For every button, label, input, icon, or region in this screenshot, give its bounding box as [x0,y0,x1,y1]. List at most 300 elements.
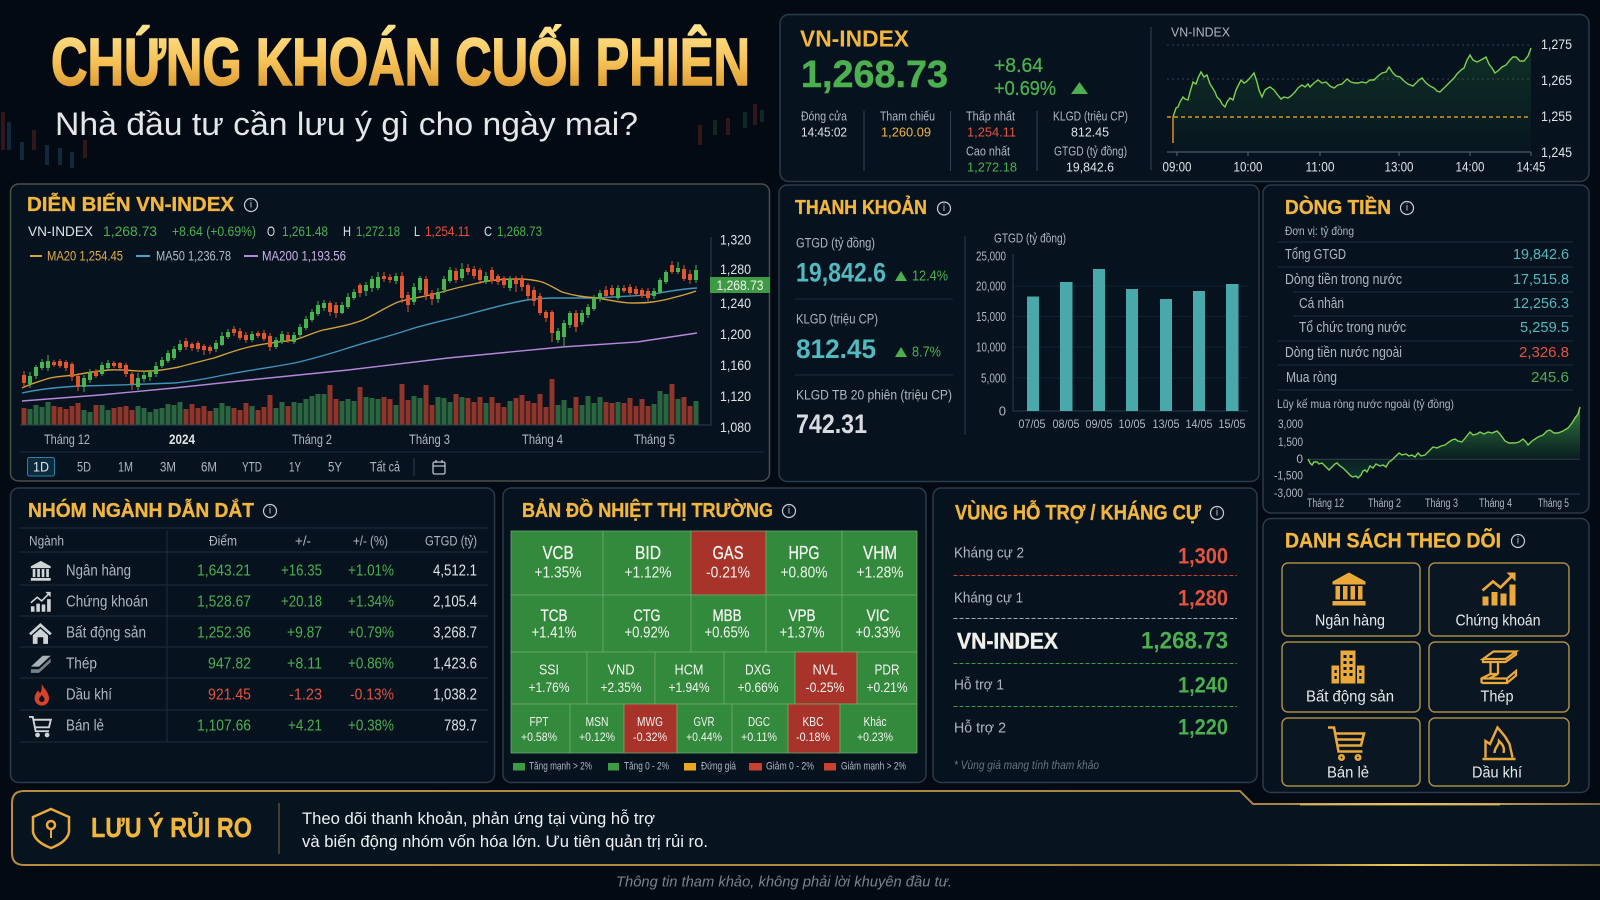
flow table: Dòng tiền trong nước [1285,272,1402,288]
session stats: Thấp nhất [966,108,1015,124]
session stats: 1,272.18 [967,160,1017,174]
row: Dầu khí: 921.45 [208,686,251,704]
row: Thép: 1,423.6 [433,656,477,672]
flow table: 17,515.8 [1513,272,1569,288]
icon: shield [33,809,69,848]
month axis: Tháng 2 [292,431,332,447]
heatmap cells: VHM [863,543,897,563]
heatmap cells: Khác [864,715,886,729]
heatmap cells: HCM [674,662,704,678]
intraday line chart: VN-INDEX [1171,24,1230,40]
row: Dầu khí: 1,038.2 [433,686,477,704]
row: Ngân hàng [31,561,477,581]
bar chart: trading value: 07/05 [1018,417,1046,431]
icon: chart [31,592,51,612]
panel: VN-INDEX summary [780,14,1589,182]
heatmap cells: -0.25% [806,679,844,695]
heatmap legend: Tăng mạnh > 2% [529,760,592,772]
risk note text: và biến động nhóm vốn hóa lớn. Ưu tiên quản trị rủi ro. [302,833,708,851]
icon: bank [31,561,51,581]
metric: KLGD [796,312,941,364]
panel: risk note band [12,791,1600,865]
OHLC row: H [343,223,351,239]
level: support 2: 1,220 [1178,714,1228,740]
card: Thép: Thép [1480,688,1514,706]
MA legend: MA50 1,236.78 [156,248,231,264]
price axis: 1,320 [720,232,751,248]
heatmap cells: VIC [866,607,890,625]
heading: DÒNG TIỀN [1285,195,1391,219]
heatmap cells: -0.32% [633,730,667,744]
row: Ngân hàng: 4,512.1 [433,562,477,580]
flow table: Tổ chức trong nước [1299,320,1406,336]
heatmap cells: VCB [542,543,574,563]
intraday line chart: 1,275 [1541,36,1572,52]
OHLC row: 1,261.48 [282,223,328,239]
candlesticks [24,261,696,392]
flow table: Tổng GTGD [1285,247,1346,263]
month axis: Tháng 5 [634,431,675,447]
month axis: Tháng 4 [522,431,563,447]
table header [29,534,477,548]
heatmap cells: +1.28% [856,564,904,582]
level: VN-INDEX: VN-INDEX [957,628,1058,654]
panel: support and resistance [933,488,1257,782]
card: Chứng khoán: Chứng khoán [1456,612,1540,630]
bar chart: trading value: 08/05 [1052,417,1080,431]
icon: info: i [250,200,252,210]
metric: GTGD [796,236,948,288]
row: Chứng khoán: Chứng khoán [66,594,148,610]
current price tag: 1,268.73 [716,277,764,293]
metric: KLGD: 812.45 [796,334,876,364]
icon: info [1210,506,1224,520]
MA legend: MA200 1,193.56 [262,248,346,264]
intraday line chart: 09:00 [1162,160,1192,174]
heatmap cells: DGC [748,715,770,729]
row: Bất động sản: 1,252.36 [197,624,251,642]
price axis: 1,280 [720,261,751,277]
row: Ngân hàng: +1.01% [348,562,394,580]
row: Dầu khí: -1.23 [289,686,322,704]
metric: GTGD: 12.4% [912,268,948,284]
heading: VÙNG HỖ TRỢ / KHÁNG CỰ [955,500,1202,524]
row: Bán lẻ: +0.38% [348,718,394,734]
icon: steel [31,656,51,673]
range buttons: 1D [33,460,49,474]
row: Chứng khoán: +20.18 [281,594,322,610]
moving average lines [22,279,697,401]
level: support 2: Hỗ trợ 2 [954,720,1006,736]
row: Chứng khoán: +1.34% [348,594,394,610]
bar chart: trading value [976,230,1248,431]
intraday line chart: 13:00 [1384,160,1414,174]
heatmap cells: MSN [586,715,608,729]
heatmap cells: DXG [745,662,771,678]
heatmap cells: +0.23% [857,730,893,744]
title: CHỨNG KHOÁN CUỐI PHIÊN [51,24,750,100]
flow table: 19,842.6 [1513,247,1569,263]
heatmap cells: GVR [694,715,714,729]
session stats: 14:45:02 [801,124,847,140]
row: Bán lẻ: 789.7 [444,718,477,734]
icon: info: i [943,203,945,214]
heatmap cells: +0.92% [624,624,670,642]
heatmap legend: Đứng giá [701,760,737,772]
heatmap cells: KBC [802,715,824,729]
heatmap cells: -0.21% [706,564,750,582]
metric: KLGD average: 742.31 [796,409,867,439]
area chart: foreign net buying: -1,500 [1274,468,1303,482]
price axis: 1,160 [720,357,751,373]
metric: KLGD: KLGD (triệu CP) [796,312,878,326]
heatmap cells: CTG [634,607,660,625]
panel: leading sectors [10,488,494,782]
card: Ngân hàng [1282,563,1420,636]
month axis: Tháng 12 [44,431,90,447]
heatmap cells: SSI [539,662,559,678]
bar chart: trading value: 10,000 [976,340,1006,354]
change values [994,55,1088,100]
heatmap cells: MWG [637,715,663,729]
OHLC row: 1,268.73 [497,223,542,239]
level: support 2 [954,714,1228,740]
panel: VN-INDEX movement [10,184,770,481]
card: Bất động sản [1282,642,1420,712]
heading: risk note: LƯU Ý RỦI RO [91,811,252,843]
flow table: Dòng tiền nước ngoài [1285,345,1402,361]
level: support 1 [954,672,1228,698]
area chart: foreign net buying: Tháng 4 [1479,498,1512,510]
heatmap cells: +0.80% [780,564,828,582]
row: Bán lẻ [29,717,477,736]
level: resistance 1: 1,280 [1178,586,1228,610]
row: Dầu khí: Dầu khí [66,686,113,704]
change values: +8.64 [994,55,1043,77]
month axis: Tháng 3 [409,431,450,447]
icon: info: i [269,506,271,516]
volume bars [24,379,696,425]
icon: chart [1482,572,1516,606]
level: support 1: Hỗ trợ 1 [954,676,1004,694]
icon: info [264,504,276,518]
level: VN-INDEX: 1,268.73 [1141,628,1228,654]
area chart: foreign net buying: Tháng 3 [1425,498,1458,510]
OHLC row [28,223,542,239]
heatmap cells: +0.12% [579,730,615,744]
heading: NHÓM NGÀNH DẪN DẮT [28,498,254,522]
card: Bán lẻ [1282,718,1420,786]
heading: DIỄN BIẾN VN-INDEX [27,193,235,216]
session stats: Tham chiếu [880,108,935,124]
MA legend [30,248,346,264]
range buttons: 6M [201,460,217,474]
bar chart: trading value: 0 [999,404,1006,418]
flow table: 2,326.8 [1519,345,1569,361]
row: Chứng khoán: 1,528.67 [197,594,251,610]
level: resistance 2: 1,300 [1178,544,1228,568]
range buttons: 3M [160,460,176,474]
area chart: foreign net buying [1274,397,1580,510]
icon: buildings [1332,650,1364,684]
icon: steel beam [1482,652,1516,683]
row: Dầu khí [35,684,477,706]
price axis: 1,200 [720,326,751,342]
month axis [44,431,675,447]
price axis [20,232,751,435]
bar chart: trading value: 10/05 [1118,417,1146,431]
row: Bán lẻ: +4.21 [288,718,322,734]
icon: info [244,198,258,212]
month axis: 2024 [169,431,195,447]
bar chart: trading value: 25,000 [976,248,1006,264]
card: Thép [1429,642,1569,712]
level: resistance 2: Kháng cự 2 [954,544,1024,562]
MA legend: MA20 1,254.45 [47,248,123,264]
row: Thép: +8.11 [287,656,322,672]
heading: BẢN ĐỒ NHIỆT THỊ TRƯỜNG [522,498,773,522]
metric: GTGD: GTGD (tỷ đồng) [796,236,875,250]
heatmap cells: MBB [712,607,742,625]
area chart: foreign net buying: Tháng 5 [1538,498,1569,510]
table header: GTGD (tỷ) [425,534,477,548]
heatmap cells: TCB [540,607,568,625]
area chart: foreign net buying: Lũy kế mua ròng nước ngoài (tỷ đồng) [1277,397,1454,411]
heatmap legend [513,760,906,772]
panel: watchlist [1263,518,1589,792]
icon: info [1400,202,1414,214]
intraday line chart: 11:00 [1306,160,1334,174]
heatmap cells: +1.35% [534,564,582,582]
intraday line chart: 14:00 [1456,160,1484,174]
price axis: 1,080 [720,419,751,435]
heading: DANH SÁCH THEO DÕI [1285,528,1501,552]
row: Ngân hàng: Ngân hàng [66,562,131,580]
heatmap cells: +0.33% [856,624,901,642]
heatmap cells: +0.44% [686,730,722,744]
heatmap cells: NVL [812,662,838,678]
range buttons: 1M [118,460,133,474]
flow table: 245.6 [1531,370,1569,386]
intraday line chart: 1,265 [1541,72,1572,88]
intraday line chart: 10:00 [1234,160,1262,174]
heatmap cells: +0.65% [704,624,750,642]
subtitle: Nhà đầu tư cần lưu ý gì cho ngày mai? [55,106,638,142]
OHLC row: +8.64 (+0.69%) [172,223,256,239]
heatmap legend: Tăng 0 - 2% [624,760,669,772]
heatmap cells: GAS [712,543,744,563]
bar chart: trading value: 13/05 [1152,417,1180,431]
area chart: foreign net buying: Tháng 12 [1307,498,1344,510]
heatmap cells: VPB [788,607,816,625]
panel: money flow [1263,185,1589,513]
row: Chứng khoán: 2,105.4 [433,594,477,610]
OHLC row: C [484,223,492,239]
heatmap cells: BID [635,543,661,563]
OHLC row: L [414,223,420,239]
icon: calendar [433,460,445,474]
heatmap cells: +1.41% [532,624,577,642]
row: Thép [31,656,477,673]
flow table: 5,259.5 [1520,320,1569,336]
range buttons: Tất cả [370,460,400,474]
range buttons [28,458,414,476]
footer disclaimer: Thông tin tham khảo, không phải lời khuyên đầu tư. [616,874,952,890]
icon: house [29,623,52,644]
session stats: Đóng cửa [801,108,848,124]
area chart: foreign net buying: -3,000 [1274,486,1303,500]
icon: info: i [1517,536,1519,546]
card: Bất động sản: Bất động sản [1306,688,1394,706]
bar chart: trading value: 09/05 [1086,417,1113,431]
OHLC row: O [267,223,275,239]
heatmap cells: HPG [788,543,820,563]
bar chart: trading value: 5,000 [981,370,1006,386]
flow table: Mua ròng [1286,370,1337,386]
heatmap cells: +0.21% [866,679,908,695]
price axis: 1,120 [720,388,751,404]
heatmap cells: VND [608,662,635,678]
table header: +/- [295,534,311,548]
range buttons: 5D [77,460,91,474]
metric: GTGD: 19,842.6 [796,258,886,288]
risk note text: Theo dõi thanh khoản, phản ứng tại vùng hỗ trợ [302,809,655,828]
area chart: foreign net buying: Tháng 2 [1368,498,1401,510]
level: support 1: 1,240 [1178,672,1228,698]
heatmap cells: +1.94% [668,679,710,695]
row: Thép: +0.86% [348,656,394,672]
row: Dầu khí: -0.13% [350,686,394,704]
icon: info: i [1406,202,1408,214]
session stats: Cao nhất [966,144,1010,158]
row: Bán lẻ: 1,107.66 [197,718,251,734]
icon: info [1512,534,1524,548]
heatmap cells: +1.76% [528,679,570,695]
level: resistance 1 [954,586,1228,610]
icon: bank [1332,572,1366,606]
price axis: 1,240 [720,295,751,311]
heatmap cells: FPT [530,715,549,729]
heatmap cells: +0.66% [738,679,778,695]
flow table: Cá nhân [1299,296,1344,312]
panel: market heatmap [503,488,926,782]
card: Ngân hàng: Ngân hàng [1315,612,1385,630]
session stats: 812.45 [1071,124,1109,140]
unit note: Đơn vị: tỷ đồng [1285,224,1354,238]
heatmap cells: -0.18% [796,730,830,744]
bar chart: trading value: GTGD (tỷ đồng) [994,230,1066,246]
heatmap cells: +2.35% [600,679,642,695]
metric: KLGD average [796,388,952,439]
level: resistance 2 [954,544,1228,568]
row: Ngân hàng: +16.35 [281,562,322,580]
heatmap legend: Giảm 0 - 2% [766,760,814,772]
range buttons: 1Y [289,460,301,474]
row: Bất động sản: +9.87 [287,624,322,642]
row: Thép: Thép [66,656,97,672]
OHLC row: VN-INDEX [28,223,94,239]
metric: KLGD: 8.7% [912,344,941,360]
heading: VN-INDEX: VN-INDEX [800,26,910,52]
heatmap legend: Giảm mạnh > 2% [841,760,906,772]
area chart: foreign net buying: 1,500 [1278,435,1303,449]
icon: info [782,504,796,518]
heatmap cells: +0.11% [741,730,777,744]
session stats: KLGD (triệu CP) [1053,108,1128,124]
intraday line chart: 1,255 [1541,108,1572,124]
intraday line chart: 1,245 [1541,144,1572,160]
intraday line chart: 14:45 [1516,160,1546,174]
footnote: * Vùng giá mang tính tham khảo [954,758,1099,772]
card: Dầu khí: Dầu khí [1472,764,1523,782]
metric: KLGD average: KLGD TB 20 phiên (triệu CP) [796,388,952,402]
row: Bất động sản: Bất động sản [66,624,146,642]
session stats: 1,254.11 [967,124,1016,140]
risk note text [302,809,708,851]
row: Bán lẻ: Bán lẻ [66,718,104,734]
heatmap cells: +1.12% [624,564,672,582]
session stats [801,27,1151,174]
row: Ngân hàng: 1,643.21 [197,562,251,580]
icon: cart [29,717,51,736]
table header: Ngành [29,534,64,548]
row: Thép: 947.82 [208,656,251,672]
row: Bất động sản: 3,268.7 [433,624,477,642]
row: Bất động sản [29,623,477,644]
panel: liquidity [779,185,1259,482]
row: Bất động sản: +0.79% [348,624,394,642]
icon: flame [35,684,49,706]
heading: THANH KHOẢN [795,196,927,219]
card: Dầu khí [1429,718,1569,786]
flow table: 12,256.3 [1513,296,1569,312]
level: resistance 1: Kháng cự 1 [954,590,1023,606]
area chart: foreign net buying: 0 [1296,452,1303,466]
card: Bán lẻ: Bán lẻ [1327,764,1369,782]
OHLC row: 1,272.18 [356,223,400,239]
heatmap cells: PDR [874,662,900,678]
bar chart: trading value: 15,000 [976,309,1006,324]
icon: info: i [1216,508,1218,518]
icon: oil flame [1482,728,1516,759]
session stats: 1,260.09 [881,124,931,140]
range buttons: 5Y [328,460,342,474]
heatmap cells [511,531,917,753]
table header: +/- (%) [353,534,388,548]
index value: 1,268.73 [801,54,948,96]
heatmap cells: +0.58% [521,730,557,744]
session stats: 19,842.6 [1066,160,1114,174]
bar chart: trading value: 15/05 [1218,417,1246,431]
bar chart: trading value: 20,000 [976,278,1006,294]
icon: info [938,202,950,215]
area chart: foreign net buying: 3,000 [1278,417,1303,431]
OHLC row: 1,268.73 [103,223,157,239]
table header: Điểm [209,534,237,548]
OHLC row: 1,254.11 [425,223,470,239]
flow table [1285,247,1569,386]
intraday line chart [1162,24,1572,174]
session stats: GTGD (tỷ đồng) [1054,144,1127,158]
heatmap cells: +1.37% [780,624,825,642]
bar chart: trading value: 14/05 [1186,417,1213,431]
card: Chứng khoán [1429,563,1569,636]
change values: +0.69% [994,78,1056,100]
row: Chứng khoán [31,592,477,612]
icon: info: i [788,506,790,516]
level: VN-INDEX [957,628,1228,654]
range buttons: YTD [242,460,262,474]
